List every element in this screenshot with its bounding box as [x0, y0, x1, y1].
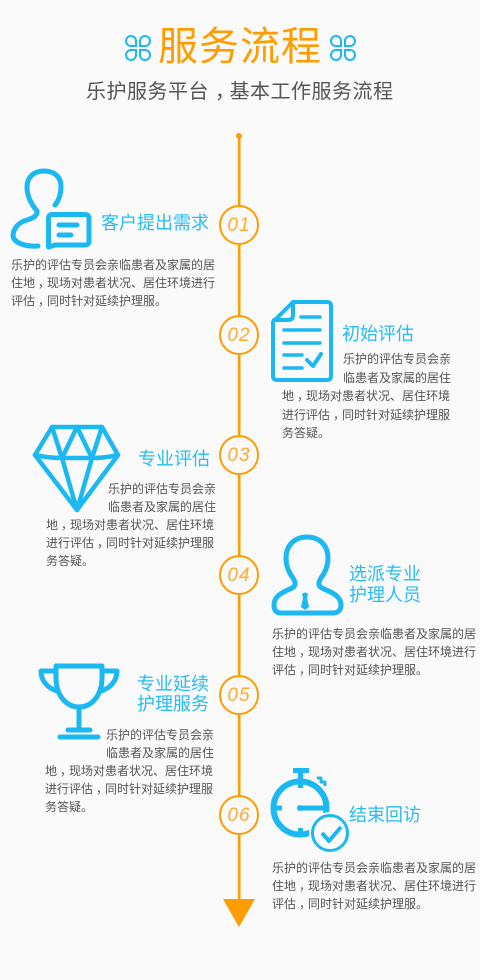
heading: step 5: 专业延续	[137, 674, 209, 694]
text: step 3: 临患者及家属的居住	[108, 500, 216, 514]
text: step 4: 住地，现场对患者状况、居住环境进行	[272, 645, 476, 659]
heading: step 2: 初始评估	[342, 324, 414, 344]
text: step 2: 临患者及家属的居住	[343, 371, 451, 385]
text: step 5: 乐护的评估专员会亲	[106, 728, 214, 742]
heading: step 6: 结束回访	[349, 805, 421, 825]
text: step 2: 进行评估，同时针对延续护理服	[282, 408, 450, 422]
text: step 1: 住地，现场对患者状况、居住环境进行	[11, 276, 215, 290]
step number 01: 01	[227, 215, 251, 236]
step number 05: 05	[227, 685, 251, 706]
text: step 2: 务答疑。	[282, 426, 330, 440]
text: step 3	[46, 482, 216, 568]
text: step 4: 乐护的评估专员会亲临患者及家属的居	[272, 627, 476, 641]
step number 04: 04	[227, 565, 251, 586]
text: step 3: 务答疑。	[46, 554, 94, 568]
text: step 2: 地，现场对患者状况、居住环境	[282, 389, 450, 403]
icon: left clover ornament	[125, 35, 151, 61]
text: step 6: 评估，同时针对延续护理服。	[272, 897, 428, 911]
text: step 6: 住地，现场对患者状况、居住环境进行	[272, 879, 476, 893]
text: step 3: 乐护的评估专员会亲	[108, 482, 216, 496]
text: step 5: 务答疑。	[45, 800, 93, 814]
text: step 1: 评估，同时针对延续护理服。	[11, 294, 167, 308]
text: step 6: 乐护的评估专员会亲临患者及家属的居	[272, 861, 476, 875]
text: step 2: 乐护的评估专员会亲	[343, 352, 451, 366]
step number 03: 03	[227, 445, 251, 466]
heading: step 4 second line: 护理人员	[349, 585, 421, 605]
text: step 5: 进行评估，同时针对延续护理服	[45, 782, 213, 796]
text: step 1	[11, 258, 215, 308]
step number 06: 06	[227, 805, 251, 826]
text: step 3: 地，现场对患者状况、居住环境	[46, 518, 214, 532]
text: step 1: 乐护的评估专员会亲临患者及家属的居	[11, 258, 215, 272]
heading: step 1: 客户提出需求	[101, 213, 209, 233]
heading: step 5 second line: 护理服务	[137, 694, 209, 714]
text: step 3: 进行评估，同时针对延续护理服	[46, 536, 214, 550]
title: 服务流程	[158, 25, 322, 69]
text: step 6	[272, 861, 476, 911]
text: step 4: 评估，同时针对延续护理服。	[272, 663, 428, 677]
icon: right clover ornament	[330, 35, 356, 61]
text: step 5: 地，现场对患者状况、居住环境	[45, 764, 213, 778]
heading: step 3: 专业评估	[138, 449, 210, 469]
text: step 4	[272, 627, 476, 677]
text: step 5: 临患者及家属的居住	[106, 746, 214, 760]
text: step 5	[45, 728, 214, 814]
heading: step 4: 选派专业	[349, 564, 421, 584]
text: step 2	[282, 352, 451, 440]
step number 02: 02	[227, 325, 251, 346]
subtitle: 乐护服务平台 ，基本工作服务流程	[86, 81, 394, 103]
